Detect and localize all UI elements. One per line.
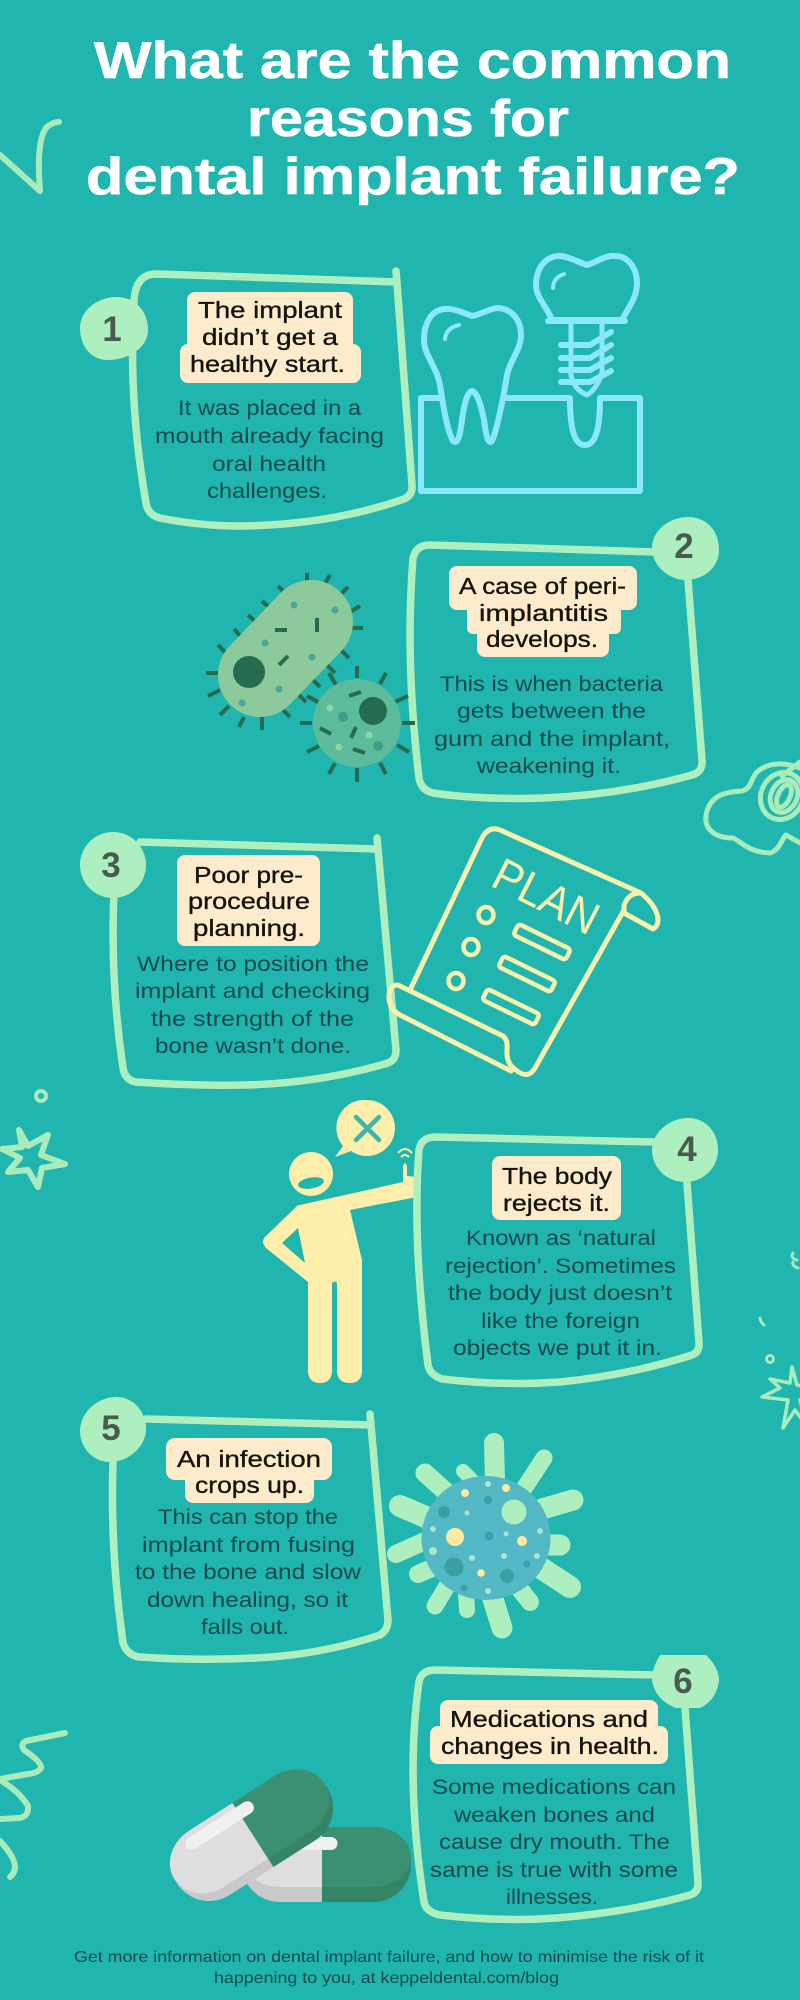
badge 1: [80, 297, 148, 360]
natural tooth: [424, 308, 521, 442]
body text 2: gets between the: [457, 700, 646, 723]
body text 1: oral health: [212, 453, 326, 476]
heading 5: crops up.: [195, 1472, 304, 1498]
heading 6: [430, 1700, 668, 1764]
implant screw: [571, 322, 602, 395]
horizontal capsule: [242, 1827, 411, 1902]
heading 6: Medications and: [450, 1706, 648, 1732]
body text 3: implant and checking: [135, 980, 370, 1003]
gum: [421, 398, 640, 491]
PLAN text: PLAN: [484, 848, 608, 945]
heading 2: develops.: [486, 626, 598, 652]
panel 2 outline: [410, 545, 702, 798]
body text 4: like the foreign: [481, 1310, 640, 1333]
badge 3: [80, 832, 146, 898]
heading 5: [166, 1438, 332, 1503]
footer: happening to you, at keppeldental.com/blog: [214, 1970, 559, 1987]
body text 5: falls out.: [201, 1616, 289, 1639]
heading 2: implantitis: [479, 600, 608, 626]
body text 4: rejection’. Sometimes: [445, 1255, 676, 1278]
body text 3: Where to position the: [137, 953, 369, 976]
body text 1: challenges.: [207, 480, 327, 503]
heading 2: A case of peri-: [459, 573, 626, 599]
panel 5 outline: [112, 1414, 388, 1659]
heading 1: didn’t get a: [202, 324, 338, 350]
body text 6: [430, 1776, 678, 1909]
body text 5: down healing, so it: [147, 1589, 348, 1612]
footer: [74, 1949, 705, 1987]
body text 4: [445, 1227, 676, 1360]
icon: virus: [396, 1443, 573, 1628]
heading 2: [449, 566, 637, 657]
heading 3: [177, 855, 320, 946]
small bacterium: [300, 666, 415, 782]
panel: reason 4: [417, 1118, 718, 1383]
panel 6 outline: [413, 1670, 698, 1919]
icon: capsules: [157, 1756, 411, 1916]
large bacterium: [206, 573, 363, 730]
panel 1 outline: [132, 271, 412, 526]
icon: person rejecting: [263, 1100, 417, 1383]
body text 5: [135, 1506, 362, 1639]
body text 5: to the bone and slow: [135, 1561, 362, 1584]
virus spikes: [396, 1443, 573, 1628]
body text 5: implant from fusing: [142, 1534, 355, 1557]
icon: plan scroll: [389, 829, 658, 1075]
heading 6: changes in health.: [441, 1733, 659, 1759]
body text 2: This is when bacteria: [440, 673, 663, 696]
badge 2: [652, 517, 719, 580]
decoration: left star and dot: [2, 1091, 65, 1187]
body: [263, 1163, 417, 1383]
body text 6: weaken bones and: [453, 1804, 655, 1827]
panel 3 outline: [113, 838, 396, 1085]
body text 4: Known as ‘natural: [466, 1227, 656, 1250]
decoration: squiggle: [0, 1733, 65, 1877]
virus body: [422, 1476, 550, 1600]
panel: reason 2: [410, 517, 719, 798]
badge 4: 4: [677, 1130, 697, 1169]
badge 1: 1: [102, 310, 122, 349]
decoration: check mark: [0, 122, 59, 191]
body text 4: objects we put it in.: [453, 1337, 662, 1360]
speech bubble: [335, 1100, 395, 1157]
body text 6: cause dry mouth. The: [439, 1831, 670, 1854]
virus dots: [429, 1481, 543, 1594]
head: [289, 1152, 333, 1196]
heading 1: The implant: [198, 297, 343, 323]
body text 5: This can stop the: [158, 1506, 338, 1529]
implant crown: [536, 256, 637, 320]
body text 1: [155, 397, 384, 503]
panel 4 outline: [417, 1137, 699, 1383]
badge 5: 5: [101, 1409, 121, 1448]
heading 3: Poor pre-: [194, 862, 303, 888]
heading 1: [180, 292, 361, 383]
heading 1: healthy start.: [190, 351, 345, 377]
panel: reason 3: [80, 832, 396, 1085]
title: What are the common: [94, 32, 731, 90]
tilted capsule: [157, 1756, 348, 1916]
body text 4: the body just doesn’t: [448, 1282, 672, 1305]
badge 5: [80, 1397, 146, 1462]
body text 6: same is true with some: [430, 1859, 678, 1882]
body text 3: bone wasn’t done.: [155, 1035, 351, 1058]
body text 6: Some medications can: [432, 1776, 676, 1799]
body text 1: It was placed in a: [178, 397, 361, 420]
panel: reason 5: [80, 1397, 388, 1659]
badge 3: 3: [101, 846, 121, 885]
heading 4: rejects it.: [503, 1190, 610, 1216]
badge 4: [652, 1118, 718, 1182]
heading 3: procedure: [188, 888, 310, 914]
decoration: scribble cloud: [706, 762, 800, 853]
heading 5: An infection: [177, 1446, 321, 1472]
body text 6: illnesses.: [506, 1886, 598, 1909]
body text 3: the strength of the: [151, 1008, 354, 1031]
scroll outline: [411, 829, 658, 988]
icon: bacteria: [206, 573, 415, 782]
checklist: [448, 907, 571, 1025]
panel: reason 6: [413, 1655, 719, 1919]
body text 3: [135, 953, 370, 1058]
body text 2: [434, 673, 670, 778]
heading 3: planning.: [193, 915, 305, 941]
title: reasons for: [247, 90, 569, 148]
body text 1: mouth already facing: [155, 425, 384, 448]
panel: reason 1: [80, 271, 412, 526]
badge 2: 2: [674, 527, 694, 566]
title: dental implant failure?: [86, 148, 740, 206]
icon: tooth and implant: [421, 256, 640, 491]
badge 6: [652, 1655, 719, 1708]
title: [86, 32, 740, 206]
body text 2: weakening it.: [476, 755, 621, 778]
decoration: right star and marks: [760, 1253, 800, 1428]
heading 4: The body: [502, 1163, 613, 1189]
heading 4: [492, 1156, 621, 1220]
signal arcs: [398, 1149, 412, 1157]
body text 2: gum and the implant,: [434, 728, 670, 751]
footer: Get more information on dental implant failure, and how to minimise the risk of it: [74, 1949, 705, 1966]
badge 6: 6: [673, 1662, 693, 1701]
